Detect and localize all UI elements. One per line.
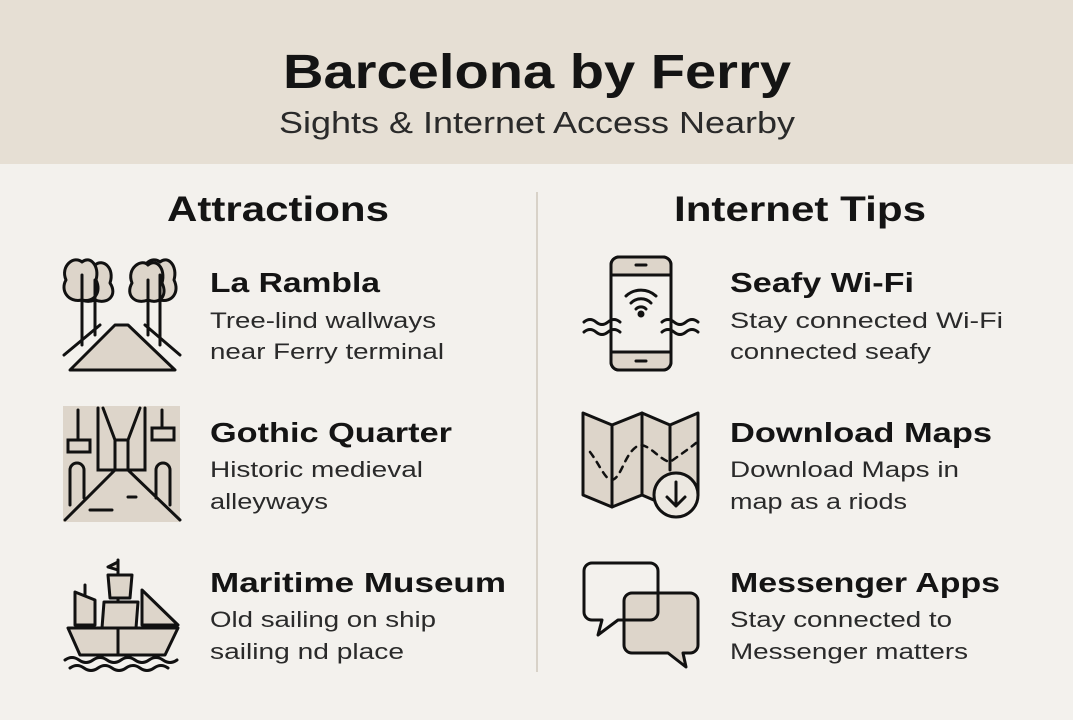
text: map as a riods (730, 489, 907, 514)
icon: chat bubbles (584, 563, 698, 667)
text: Download Maps in (730, 457, 959, 482)
text: Tree-lind wallways (210, 308, 436, 333)
title: Gothic Quarter (210, 417, 452, 448)
icon: folded map with download (583, 413, 698, 517)
item: Gothic Quarter (63, 406, 452, 522)
text: Old sailing on ship (210, 607, 436, 632)
subtitle: Sights & Internet Access Nearby (279, 105, 796, 140)
item: Maritime Museum (65, 560, 506, 670)
title: Download Maps (730, 417, 992, 448)
heading: internet tips: Internet Tips (674, 190, 926, 229)
item: Seafy Wi-Fi (584, 257, 1003, 370)
icon: phone with wifi (584, 257, 698, 370)
item: Download Maps (583, 413, 992, 517)
item: La Rambla (64, 260, 444, 370)
text: connected seafy (730, 339, 931, 364)
text: Messenger matters (730, 639, 968, 664)
text: Stay connected to (730, 607, 952, 632)
title: La Rambla (210, 267, 381, 298)
heading: attractions: Attractions (167, 190, 389, 229)
title: Seafy Wi-Fi (730, 267, 914, 298)
text: Stay connected Wi-Fi (730, 308, 1003, 333)
icon: sailing ship (65, 560, 178, 670)
text: near Ferry terminal (210, 339, 444, 364)
text: alleyways (210, 489, 328, 514)
header band (0, 0, 1073, 164)
title: Barcelona by Ferry (283, 46, 791, 99)
text: sailing nd place (210, 639, 404, 664)
item: Messenger Apps (584, 563, 1000, 667)
text: Historic medieval (210, 457, 423, 482)
title: Maritime Museum (210, 567, 506, 598)
icon: narrow street (63, 406, 180, 522)
icon: tree-lined road (64, 260, 180, 370)
title: Messenger Apps (730, 567, 1000, 598)
